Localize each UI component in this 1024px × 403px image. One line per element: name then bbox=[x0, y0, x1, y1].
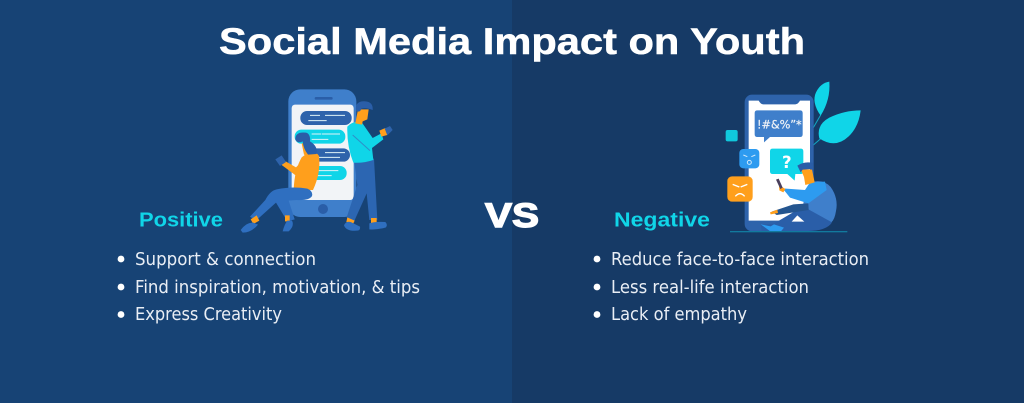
list: negative points: Reduce face-to-face interaction bbox=[611, 250, 869, 270]
list: positive points: Support & connection bbox=[135, 250, 316, 270]
speech bubble: symbols bbox=[755, 110, 803, 142]
illustration: people with phone bbox=[241, 89, 393, 233]
speech bubble: question: ? bbox=[782, 153, 792, 172]
heading: Positive: Positive bbox=[139, 208, 223, 232]
icon: small cyan emoji bbox=[726, 130, 738, 141]
list: positive points bbox=[118, 250, 420, 325]
ground line bbox=[730, 231, 847, 232]
icon: large phone bbox=[288, 89, 356, 217]
icon: orange angry emoji bbox=[727, 176, 753, 202]
panel: negative background bbox=[512, 0, 1024, 403]
figure: seated person bbox=[761, 162, 837, 232]
list: positive points: Express Creativity bbox=[135, 305, 282, 325]
figure: sitting woman bbox=[241, 132, 319, 233]
list: positive points: Find inspiration, motivation, & tips bbox=[135, 278, 420, 298]
speech bubble: question bbox=[770, 149, 803, 181]
VS label: VS bbox=[485, 197, 539, 235]
figure: standing man bbox=[344, 101, 393, 231]
icon: phone bbox=[745, 95, 814, 231]
list: negative points: Less real-life interaction bbox=[611, 278, 809, 298]
list: negative points: Lack of empathy bbox=[611, 305, 747, 325]
illustration: person with hostile messages bbox=[726, 82, 861, 232]
speech bubble: symbols: !#&%”* bbox=[757, 117, 802, 131]
title: Social Media Impact on Youth bbox=[219, 20, 805, 62]
heading: Negative: Negative bbox=[614, 208, 710, 232]
list: negative points bbox=[594, 250, 869, 325]
panel: positive background bbox=[0, 0, 512, 403]
icon: leaves bbox=[813, 82, 861, 145]
icon: blue angry emoji bbox=[739, 149, 759, 168]
